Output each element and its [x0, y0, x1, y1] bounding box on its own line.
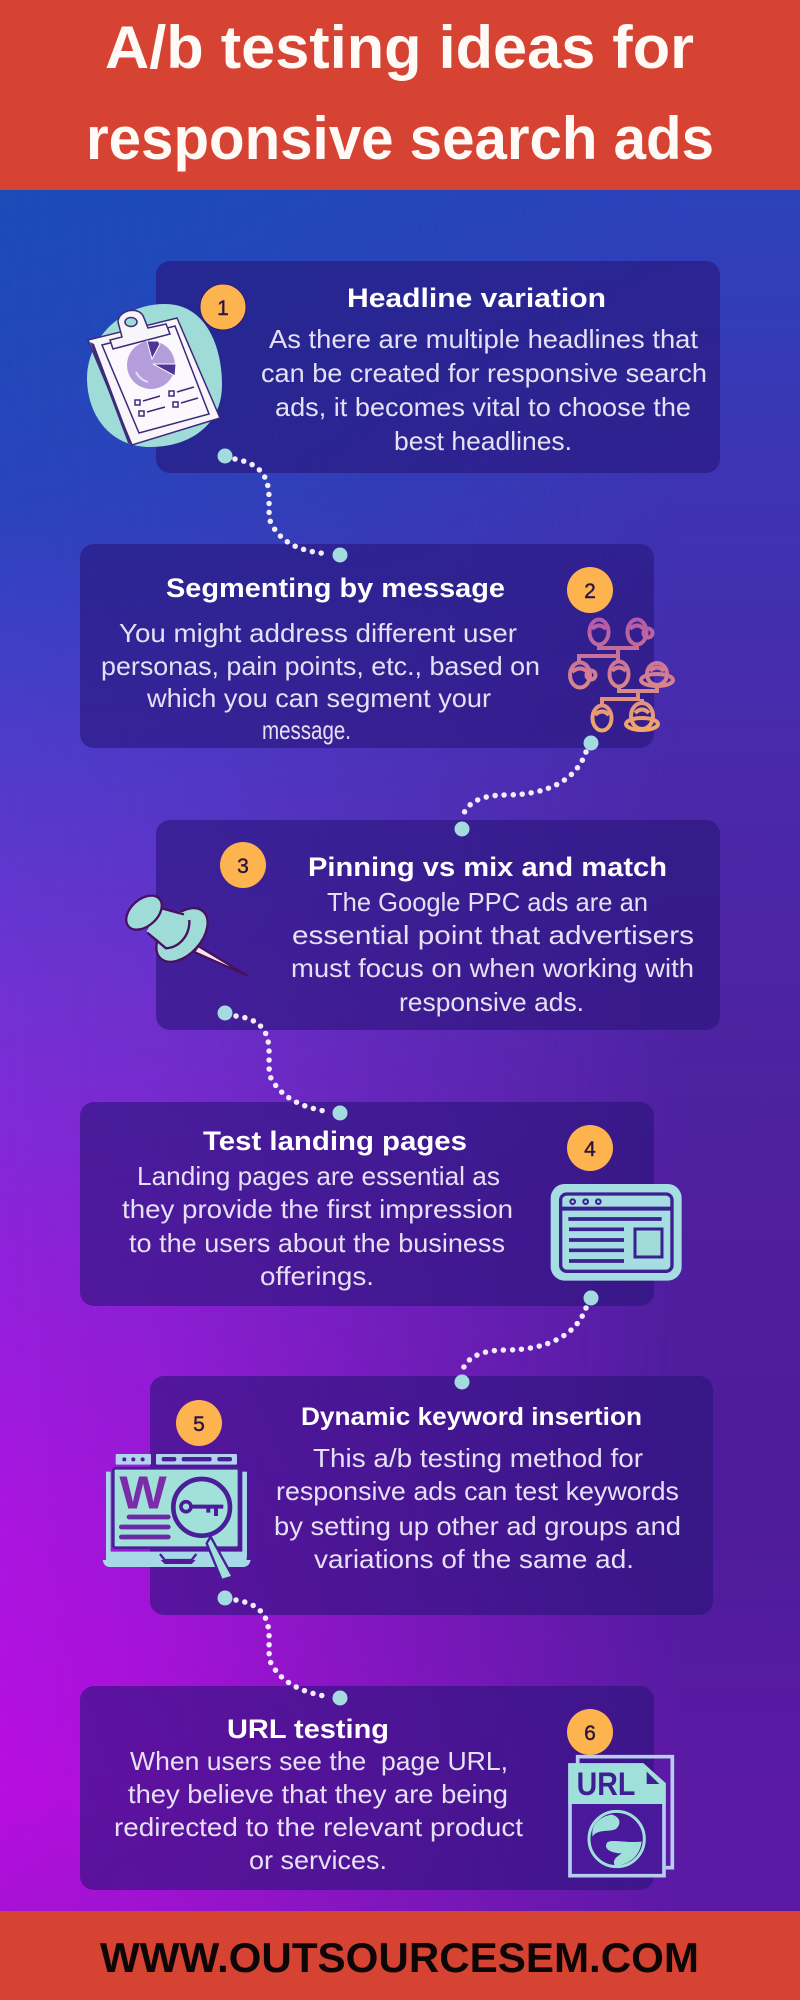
heading 3: Pinning vs mix and match — [308, 852, 667, 882]
body text 6 — [114, 1746, 524, 1875]
title: A/b testing ideas for — [105, 14, 694, 81]
panel 4: test landing pages — [80, 1102, 654, 1306]
body text 1 — [261, 324, 707, 456]
title — [86, 14, 714, 172]
badge 1: 1 — [217, 297, 229, 320]
body text 6: or services. — [249, 1845, 387, 1875]
badge 5 — [176, 1400, 222, 1446]
body text 4: to the users about the business — [129, 1228, 505, 1258]
connector 1 to 2 — [218, 448, 348, 562]
connector 5 to 6 — [218, 1590, 348, 1706]
body text 5: by setting up other ad groups and — [274, 1511, 681, 1541]
body text 5 — [274, 1443, 681, 1574]
title banner — [0, 0, 800, 190]
badge 1 — [200, 284, 246, 330]
body text 5: variations of the same ad. — [314, 1544, 634, 1574]
body text 1: As there are multiple headlines that — [269, 324, 699, 354]
body text 6: they believe that they are being — [128, 1779, 508, 1809]
panel 3: pinning vs mix and match — [156, 820, 720, 1030]
panel 1: headline variation — [156, 261, 720, 473]
panel 6: url testing — [80, 1686, 654, 1890]
connector 4 to 5 — [454, 1290, 598, 1390]
body text 5: This a/b testing method for — [313, 1443, 643, 1473]
connector 3 to 4 — [218, 1006, 348, 1120]
icon 4: browser window — [551, 1184, 682, 1281]
body text 2: You might address different user — [119, 618, 517, 648]
website url: WWW.OUTSOURCESEM.COM — [100, 1934, 699, 1981]
body text 6: When users see the page URL, — [130, 1746, 508, 1776]
body text 4 — [122, 1161, 513, 1291]
panel 5: dynamic keyword insertion — [150, 1376, 713, 1615]
body text 2: personas, pain points, etc., based on — [101, 651, 540, 681]
body text 3: The Google PPC ads are an — [327, 887, 648, 917]
body text 3: essential point that advertisers — [292, 920, 694, 950]
body text 2: message. — [262, 715, 351, 745]
badge 3: 3 — [237, 855, 249, 878]
badge 3 — [220, 842, 266, 888]
body text 5: responsive ads can test keywords — [276, 1476, 679, 1506]
badge 6 — [567, 1709, 613, 1755]
panel 2: segmenting by message — [80, 544, 654, 748]
badge 5: 5 — [193, 1413, 205, 1436]
badge 4: 4 — [584, 1138, 596, 1161]
body text 3: responsive ads. — [399, 987, 584, 1017]
body text 1: ads, it becomes vital to choose the — [275, 392, 691, 422]
badge 2 — [567, 567, 613, 613]
body text 4: offerings. — [260, 1261, 374, 1291]
heading 6: URL testing — [227, 1714, 389, 1744]
icon 5: laptop with keyword magnifier — [103, 1454, 251, 1580]
footer banner — [0, 1911, 800, 2000]
heading 5: Dynamic keyword insertion — [301, 1403, 642, 1431]
heading 1: Headline variation — [347, 283, 606, 313]
icon 6: url document with globe — [568, 1757, 672, 1876]
icon 2: people hierarchy chart — [570, 620, 673, 730]
heading 4: Test landing pages — [203, 1126, 467, 1156]
badge 2: 2 — [584, 580, 596, 603]
title: responsive search ads — [86, 105, 714, 172]
icon 5: laptop with keyword magnifier: W — [119, 1466, 167, 1518]
icon 6: url document with globe: URL — [577, 1765, 635, 1802]
body text 3: must focus on when working with — [291, 953, 694, 983]
body text 1: best headlines. — [394, 426, 572, 456]
body text 6: redirected to the relevant product — [114, 1812, 524, 1842]
body text 2: which you can segment your — [146, 683, 491, 713]
body text 4: they provide the first impression — [122, 1194, 513, 1224]
heading 2: Segmenting by message — [166, 573, 505, 603]
body text 4: Landing pages are essential as — [137, 1161, 500, 1191]
icon 3: push pin — [120, 889, 247, 975]
badge 6: 6 — [584, 1722, 596, 1745]
body text 2 — [101, 618, 540, 745]
badge 4 — [567, 1125, 613, 1171]
connector 2 to 3 — [454, 736, 598, 836]
body text 3 — [291, 887, 694, 1017]
body text 1: can be created for responsive search — [261, 358, 707, 388]
icon 1: clipboard with pie chart — [87, 304, 222, 447]
